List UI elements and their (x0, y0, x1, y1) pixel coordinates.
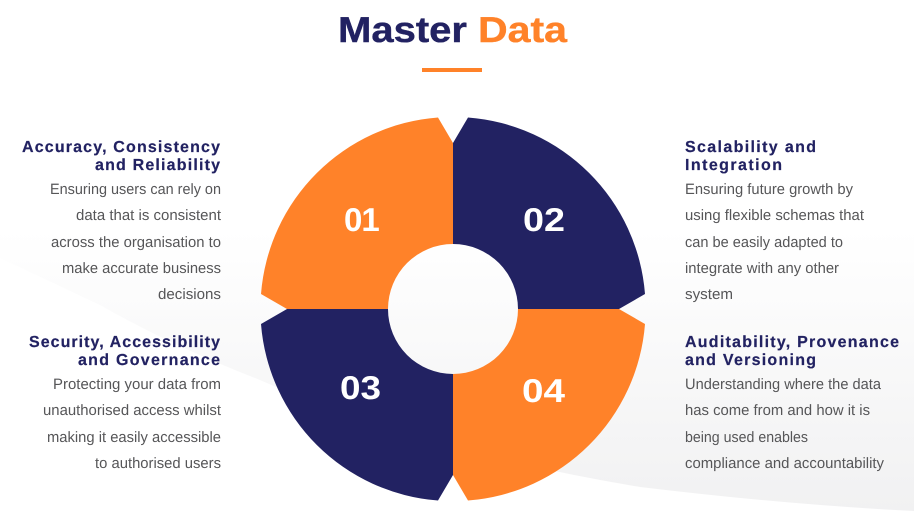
donut chart (261, 118, 645, 500)
heading 02 (685, 139, 816, 174)
body 01: data that is consistent (76, 207, 222, 224)
title underline (422, 68, 482, 72)
body 01: across the organisation to (51, 234, 221, 251)
segment 01: 01 (344, 201, 379, 238)
segment 01 (261, 118, 453, 309)
text block 01 (22, 139, 222, 303)
body 02: Ensuring future growth by (685, 181, 853, 198)
text block 04 (685, 334, 899, 472)
text block 03 (29, 334, 222, 472)
segment 02 (453, 118, 645, 309)
heading 01: Accuracy, Consistency (22, 139, 220, 156)
body 01: decisions (158, 286, 221, 303)
body 02: system (685, 286, 733, 303)
body 03: Protecting your data from (53, 376, 221, 393)
body 04 (685, 376, 884, 472)
segment 02: 02 (523, 201, 565, 238)
body 03: to authorised users (95, 455, 221, 472)
segment 04: 04 (522, 372, 566, 409)
title (338, 9, 568, 50)
title: Master (338, 9, 467, 50)
body 04: compliance and accountability (685, 455, 884, 472)
heading 04: Auditability, Provenance (685, 334, 899, 351)
body 04: being used enables (685, 429, 808, 446)
body 03 (43, 376, 222, 472)
body 01: make accurate business (62, 260, 221, 277)
body 04: has come from and how it is (685, 402, 870, 419)
heading 01 (22, 139, 220, 174)
body 02 (685, 181, 865, 303)
segment 03 (261, 309, 453, 500)
segment 03: 03 (340, 369, 381, 406)
text block 02 (685, 139, 865, 303)
background swoosh (0, 230, 914, 511)
heading 04 (685, 334, 899, 369)
body 01 (50, 181, 222, 303)
body 02: integrate with any other (685, 260, 839, 277)
heading 04: and Versioning (685, 352, 816, 369)
heading 03: and Governance (78, 352, 220, 369)
body 02: can be easily adapted to (685, 234, 843, 251)
body 02: using flexible schemas that (685, 207, 865, 224)
heading 03: Security, Accessibility (29, 334, 220, 351)
title: Data (478, 9, 568, 50)
body 03: making it easily accessible (47, 429, 221, 446)
segment 04 (453, 309, 645, 500)
heading 03 (29, 334, 220, 369)
body 04: Understanding where the data (685, 376, 882, 393)
heading 01: and Reliability (95, 157, 220, 174)
body 01: Ensuring users can rely on (50, 181, 221, 198)
heading 02: Scalability and (685, 139, 816, 156)
heading 02: Integration (685, 157, 782, 174)
body 03: unauthorised access whilst (43, 402, 222, 419)
